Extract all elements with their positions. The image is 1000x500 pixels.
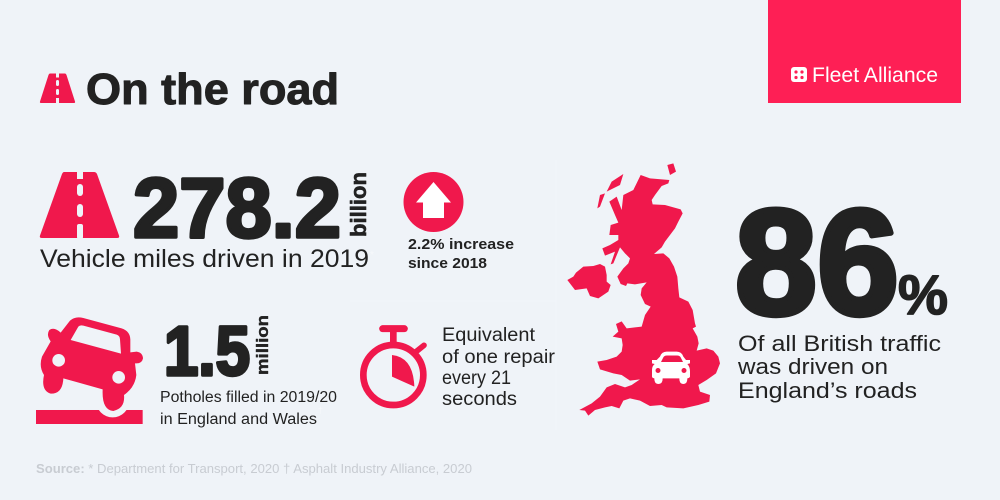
footnote mark: † bbox=[318, 405, 323, 415]
caption: potholes: Potholes filled in 2019/20 bbox=[160, 389, 337, 406]
Great Britain bbox=[579, 175, 720, 416]
icon: large road bbox=[40, 171, 119, 239]
increase text bbox=[408, 236, 514, 272]
unit: billion: billion bbox=[346, 172, 371, 237]
source note: Source: * Department for Transport, 2020 † Asphalt Industry Alliance, 2020 bbox=[36, 462, 472, 476]
big number 278.2: 278.2 bbox=[133, 161, 341, 255]
percent sign: % bbox=[898, 263, 948, 326]
caption: potholes: in England and Wales bbox=[160, 411, 317, 428]
increase text: 2.2% increase bbox=[408, 236, 514, 253]
caption: England share bbox=[737, 331, 941, 403]
logo icon bbox=[791, 67, 807, 82]
Northern Ireland bbox=[567, 264, 611, 298]
car headlights bbox=[656, 368, 686, 373]
repair text: seconds bbox=[442, 389, 517, 410]
map: United Kingdom bbox=[567, 163, 720, 416]
panel: repair rate bbox=[363, 325, 556, 410]
repair text: Equivalent bbox=[442, 325, 536, 346]
caption: England share: Of all British traffic bbox=[738, 331, 941, 356]
panel: vehicle miles bbox=[40, 161, 374, 273]
big number 86: 86 bbox=[735, 178, 899, 346]
repair text: every 21 bbox=[442, 368, 511, 389]
Scottish islands bbox=[597, 163, 676, 208]
panel: increase bbox=[404, 172, 514, 272]
repair text: of one repair bbox=[442, 347, 556, 368]
increase text: since 2018 bbox=[408, 255, 487, 272]
caption: England share: England’s roads bbox=[738, 378, 917, 403]
icon: car on map bbox=[652, 352, 690, 384]
car window bbox=[661, 356, 683, 362]
logo wordmark: Fleet Alliance bbox=[812, 64, 938, 87]
title: On the road bbox=[86, 65, 339, 114]
unit: million: million bbox=[253, 315, 272, 375]
panel: potholes bbox=[36, 312, 337, 428]
footnote mark: * bbox=[370, 250, 374, 261]
icon: up arrow bbox=[404, 172, 464, 232]
big number 1.5: 1.5 bbox=[164, 312, 250, 390]
icon: stopwatch bbox=[363, 328, 424, 405]
caption: potholes bbox=[160, 389, 337, 428]
caption: England share: was driven on bbox=[737, 354, 888, 379]
repair text bbox=[442, 325, 556, 410]
icon: car in pothole bbox=[36, 317, 143, 424]
caption: vehicle miles: Vehicle miles driven in 2019 bbox=[40, 245, 369, 273]
icon: small road bbox=[40, 73, 75, 104]
logo panel bbox=[768, 0, 961, 103]
